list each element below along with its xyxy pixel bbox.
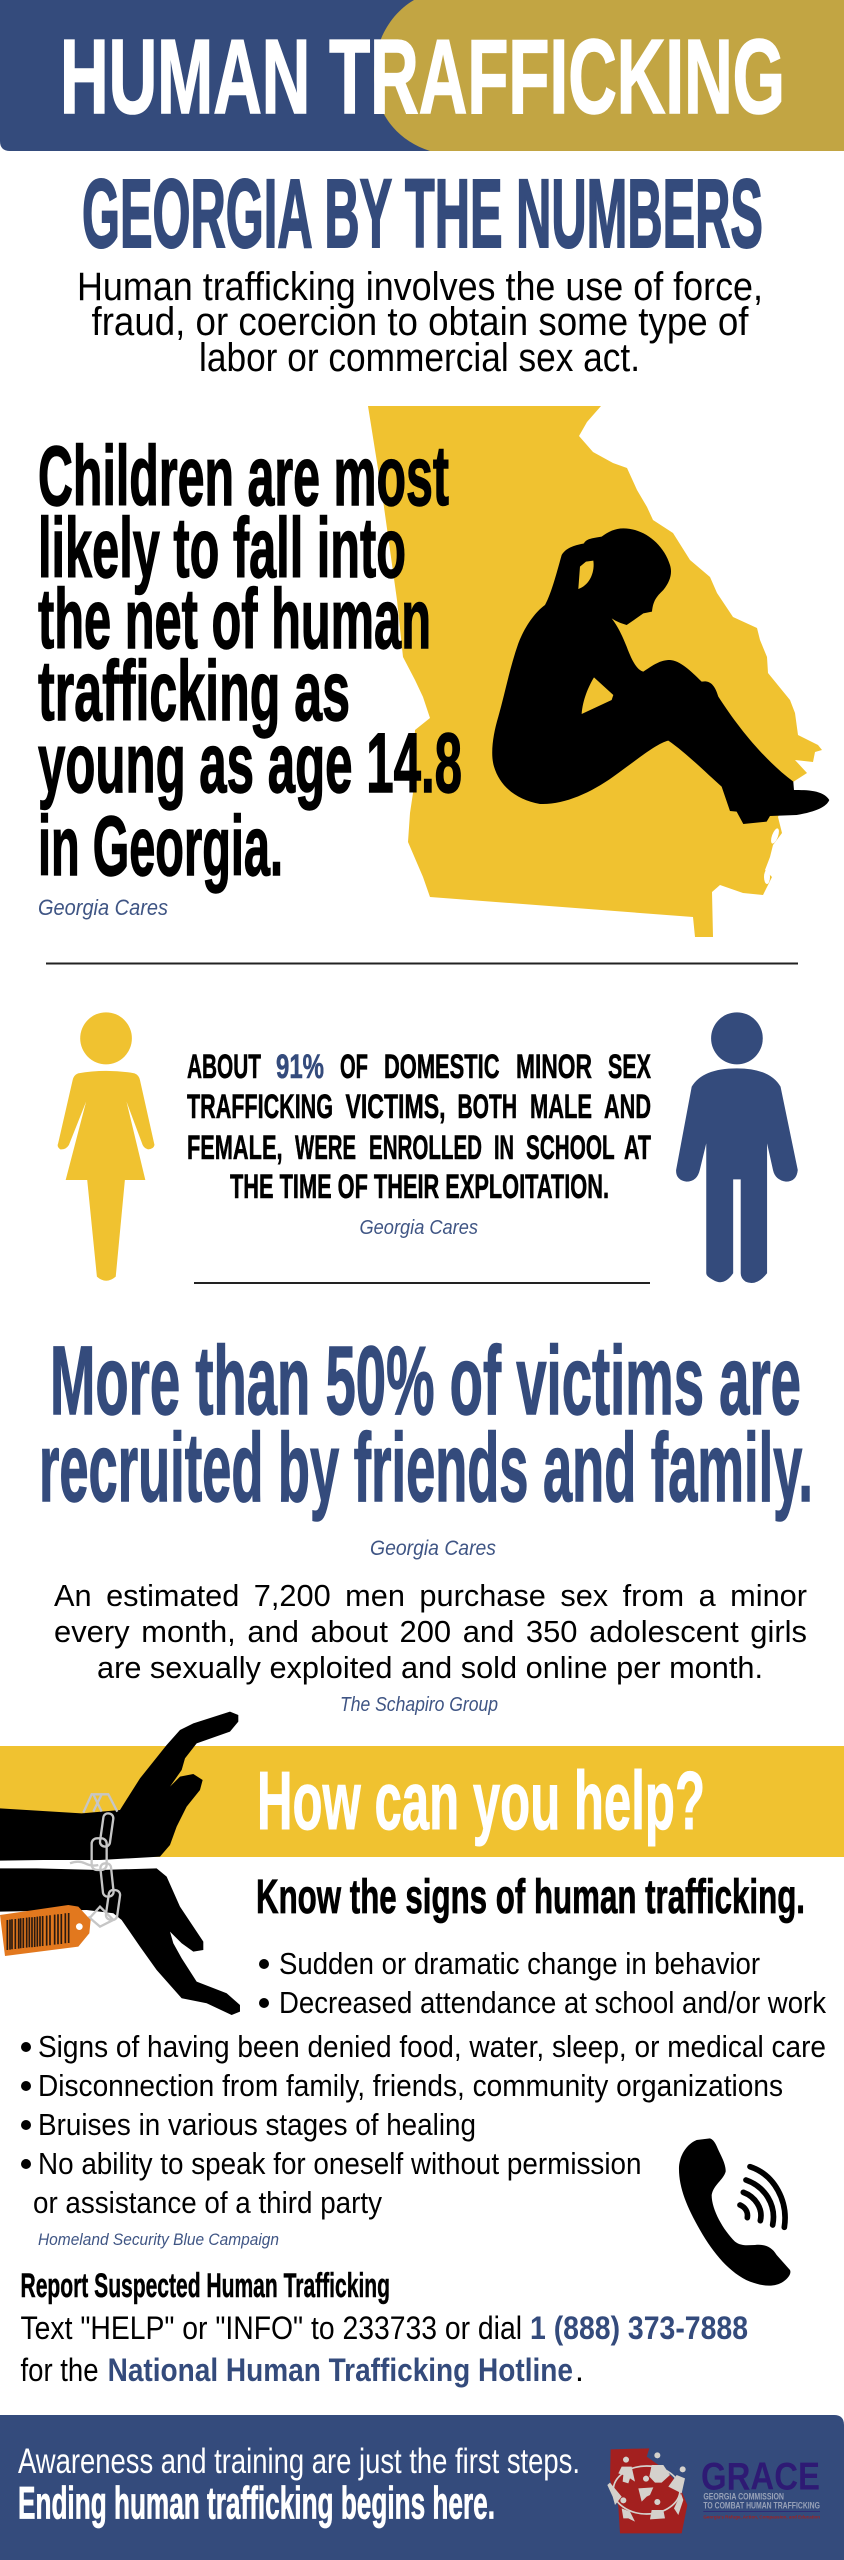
hotline text: 1 (888) 373-7888 bbox=[530, 2310, 748, 2346]
headline: children: Children are most bbox=[38, 429, 449, 523]
headline: recruited by friends and family bbox=[39, 1326, 813, 1522]
logo: GRACE commission: GRACE bbox=[701, 2455, 820, 2498]
statistic: 91 percent: ABOUT bbox=[187, 1048, 261, 1086]
headline: children: likely to fall into bbox=[38, 501, 406, 595]
list of signs: Disconnection from family, friends, community organizations bbox=[38, 2068, 783, 2103]
list of signs: Sudden or dramatic change in behavior bbox=[279, 1946, 760, 1981]
list of signs bbox=[21, 1946, 826, 2220]
headline: children: the net of human bbox=[38, 572, 431, 666]
headline: children: in Georgia. bbox=[38, 799, 283, 893]
source: homeland security: Homeland Security Blue Campaign bbox=[38, 2230, 279, 2249]
source: georgia cares: Georgia Cares bbox=[360, 1217, 478, 1239]
hotline text: . bbox=[575, 2352, 584, 2388]
logo: GRACE commission: GEORGIA COMMISSION bbox=[703, 2491, 784, 2501]
statistic: 91 percent: TRAFFICKING bbox=[187, 1088, 333, 1126]
icon: male figure bbox=[676, 1012, 798, 1283]
list of signs: No ability to speak for oneself without permission bbox=[38, 2146, 642, 2181]
definition text bbox=[77, 265, 763, 380]
statistic: 91 percent: SCHOOL bbox=[526, 1129, 615, 1167]
statistic: 91 percent: 91% bbox=[276, 1048, 324, 1086]
footer band bbox=[0, 2415, 844, 2560]
source: georgia cares: Georgia Cares bbox=[38, 895, 168, 920]
hotline text: Text "HELP" or "INFO" to 233733 or dial bbox=[20, 2310, 522, 2346]
statistic: 91 percent: AT bbox=[624, 1129, 651, 1167]
statistic: 91 percent: AND bbox=[604, 1088, 651, 1126]
statistic paragraph: are sexually exploited and sold online per month. bbox=[97, 1650, 763, 1685]
statistic paragraph: every month, and about 200 and 350 adolescent girls bbox=[54, 1614, 807, 1649]
georgia map bbox=[368, 406, 822, 937]
statistic: 91 percent: VICTIMS, bbox=[346, 1088, 446, 1126]
statistic: 91 percent bbox=[187, 1048, 651, 1206]
logo: GRACE commission bbox=[607, 2448, 820, 2533]
icon: chained hands with barcode tag bbox=[0, 1712, 240, 2015]
statistic: 91 percent: OF bbox=[340, 1048, 368, 1086]
statistic: 91 percent: BOTH bbox=[458, 1088, 517, 1126]
list of signs: Bruises in various stages of healing bbox=[38, 2107, 476, 2142]
footer message: Awareness and training are just the first steps. bbox=[18, 2442, 580, 2481]
headline: children bbox=[38, 429, 462, 893]
footer band: Ending human trafficking begins here. bbox=[18, 2478, 495, 2528]
headline: children: young as age 14.8 bbox=[38, 716, 462, 810]
statistic: 91 percent: FEMALE, bbox=[187, 1129, 282, 1167]
hotline text: for the bbox=[20, 2352, 98, 2388]
source: georgia cares: Georgia Cares bbox=[370, 1537, 496, 1560]
how can you help band bbox=[0, 1746, 844, 1857]
statistic: 91 percent: MINOR bbox=[516, 1048, 592, 1086]
statistic: 91 percent: THE TIME OF THEIR EXPLOITATION. bbox=[230, 1168, 609, 1206]
icon: telephone bbox=[679, 2138, 790, 2286]
definition text: Human trafficking involves the use of force, bbox=[77, 265, 763, 309]
statistic: 91 percent: SEX bbox=[608, 1048, 651, 1086]
hotline text: National Human Trafficking Hotline bbox=[108, 2352, 573, 2388]
statistic: 91 percent: DOMESTIC bbox=[384, 1048, 500, 1086]
definition text: fraud, or coercion to obtain some type of bbox=[92, 300, 749, 344]
hotline text bbox=[20, 2310, 748, 2388]
statistic paragraph: An estimated 7,200 men purchase sex from a minor bbox=[54, 1578, 807, 1613]
headline: children: trafficking as bbox=[38, 644, 350, 738]
statistic: 91 percent: MALE bbox=[530, 1088, 592, 1126]
source: schapiro group: The Schapiro Group bbox=[340, 1694, 498, 1716]
statistic: 91 percent: ENROLLED bbox=[369, 1129, 482, 1167]
statistic: 91 percent: WERE bbox=[295, 1129, 356, 1167]
definition text: labor or commercial sex act. bbox=[199, 336, 640, 380]
icon: seated girl silhouette bbox=[492, 528, 829, 824]
header banner bbox=[0, 0, 844, 151]
icon: female figure bbox=[58, 1012, 154, 1281]
statistic paragraph bbox=[54, 1578, 807, 1685]
logo: GRACE commission: Georgia's Refuge, Action, Compassion, and Education bbox=[703, 2515, 820, 2520]
statistic: 91 percent: IN bbox=[494, 1129, 514, 1167]
list of signs: or assistance of a third party bbox=[33, 2185, 382, 2220]
report heading: Report Suspected Human Trafficking bbox=[20, 2267, 390, 2305]
